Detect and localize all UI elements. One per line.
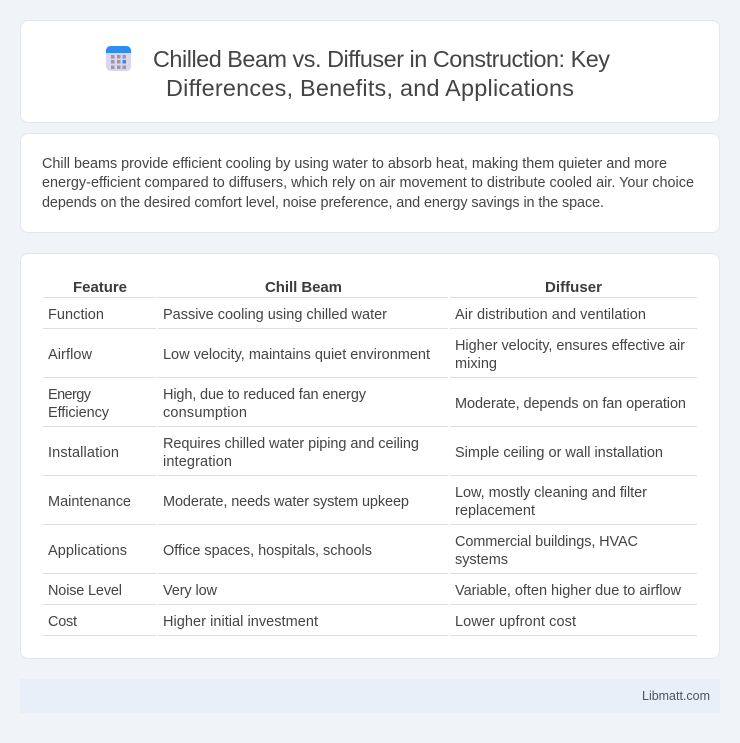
row: energy efficiency: consumption — [163, 405, 247, 421]
title: Chilled Beam vs. Diffuser in Construction: Key — [153, 46, 610, 72]
row: cost — [48, 614, 576, 630]
table header: Chill Beam — [265, 279, 342, 296]
row: cost: Lower upfront cost — [455, 614, 576, 630]
row: maintenance: replacement — [455, 503, 535, 519]
footer credit: Libmatt.com — [642, 689, 710, 703]
row: function — [48, 307, 646, 323]
row: energy efficiency: Energy — [48, 387, 92, 403]
row: energy efficiency: Efficiency — [48, 405, 110, 421]
row: maintenance — [48, 485, 647, 519]
intro text block: Chill beams provide efficient cooling by using water to absorb heat, making them quieter and more — [42, 156, 667, 172]
intro text block: energy-efficient compared to diffusers, which rely on air movement to distribute cooled air. Your choice — [42, 175, 694, 191]
table header: Feature — [73, 279, 127, 296]
panel: title card — [20, 20, 720, 123]
row: energy efficiency — [48, 387, 686, 421]
row: installation: Requires chilled water piping and ceiling — [163, 436, 419, 452]
row: airflow — [48, 338, 685, 372]
row: applications: Office spaces, hospitals, schools — [163, 543, 372, 559]
row: airflow: Higher velocity, ensures effective air — [455, 338, 685, 354]
table rules — [43, 297, 697, 636]
row: function: Air distribution and ventilation — [455, 307, 646, 323]
row: noise level: Noise Level — [48, 583, 122, 599]
row: function: Passive cooling using chilled water — [163, 307, 387, 323]
row: airflow: Low velocity, maintains quiet environment — [163, 347, 430, 363]
title — [153, 46, 610, 101]
row: applications — [48, 534, 638, 568]
row: airflow: Airflow — [48, 347, 93, 363]
title: Differences, Benefits, and Applications — [166, 75, 574, 101]
row: applications: Commercial buildings, HVAC — [455, 534, 638, 550]
table header: Diffuser — [545, 279, 602, 296]
row: noise level — [48, 583, 682, 599]
row: installation: Installation — [48, 445, 119, 461]
row: installation: Simple ceiling or wall installation — [455, 445, 663, 461]
panel: footer bar — [20, 679, 720, 713]
comparison table — [43, 279, 697, 636]
row: installation — [48, 436, 663, 470]
row: applications: Applications — [48, 543, 127, 559]
intro text block: depends on the desired comfort level, noise preference, and energy savings in the space. — [42, 195, 604, 211]
row: function: Function — [48, 307, 104, 323]
panel: intro card — [20, 133, 720, 233]
row: energy efficiency: High, due to reduced fan energy — [163, 387, 367, 403]
row: maintenance: Maintenance — [48, 494, 131, 510]
row: cost: Cost — [48, 614, 77, 630]
row: noise level: Variable, often higher due to airflow — [455, 583, 682, 599]
row: airflow: mixing — [455, 356, 497, 372]
panel: comparison table card — [20, 253, 720, 659]
row: noise level: Very low — [163, 583, 218, 599]
row: installation: integration — [163, 454, 232, 470]
intro text block — [42, 156, 694, 211]
row: maintenance: Moderate, needs water system upkeep — [163, 494, 409, 510]
table header — [73, 279, 602, 296]
row: maintenance: Low, mostly cleaning and filter — [455, 485, 647, 501]
row: energy efficiency: Moderate, depends on fan operation — [455, 396, 686, 412]
row: applications: systems — [455, 552, 508, 568]
icon: calendar — [106, 46, 131, 71]
row: cost: Higher initial investment — [163, 614, 318, 630]
